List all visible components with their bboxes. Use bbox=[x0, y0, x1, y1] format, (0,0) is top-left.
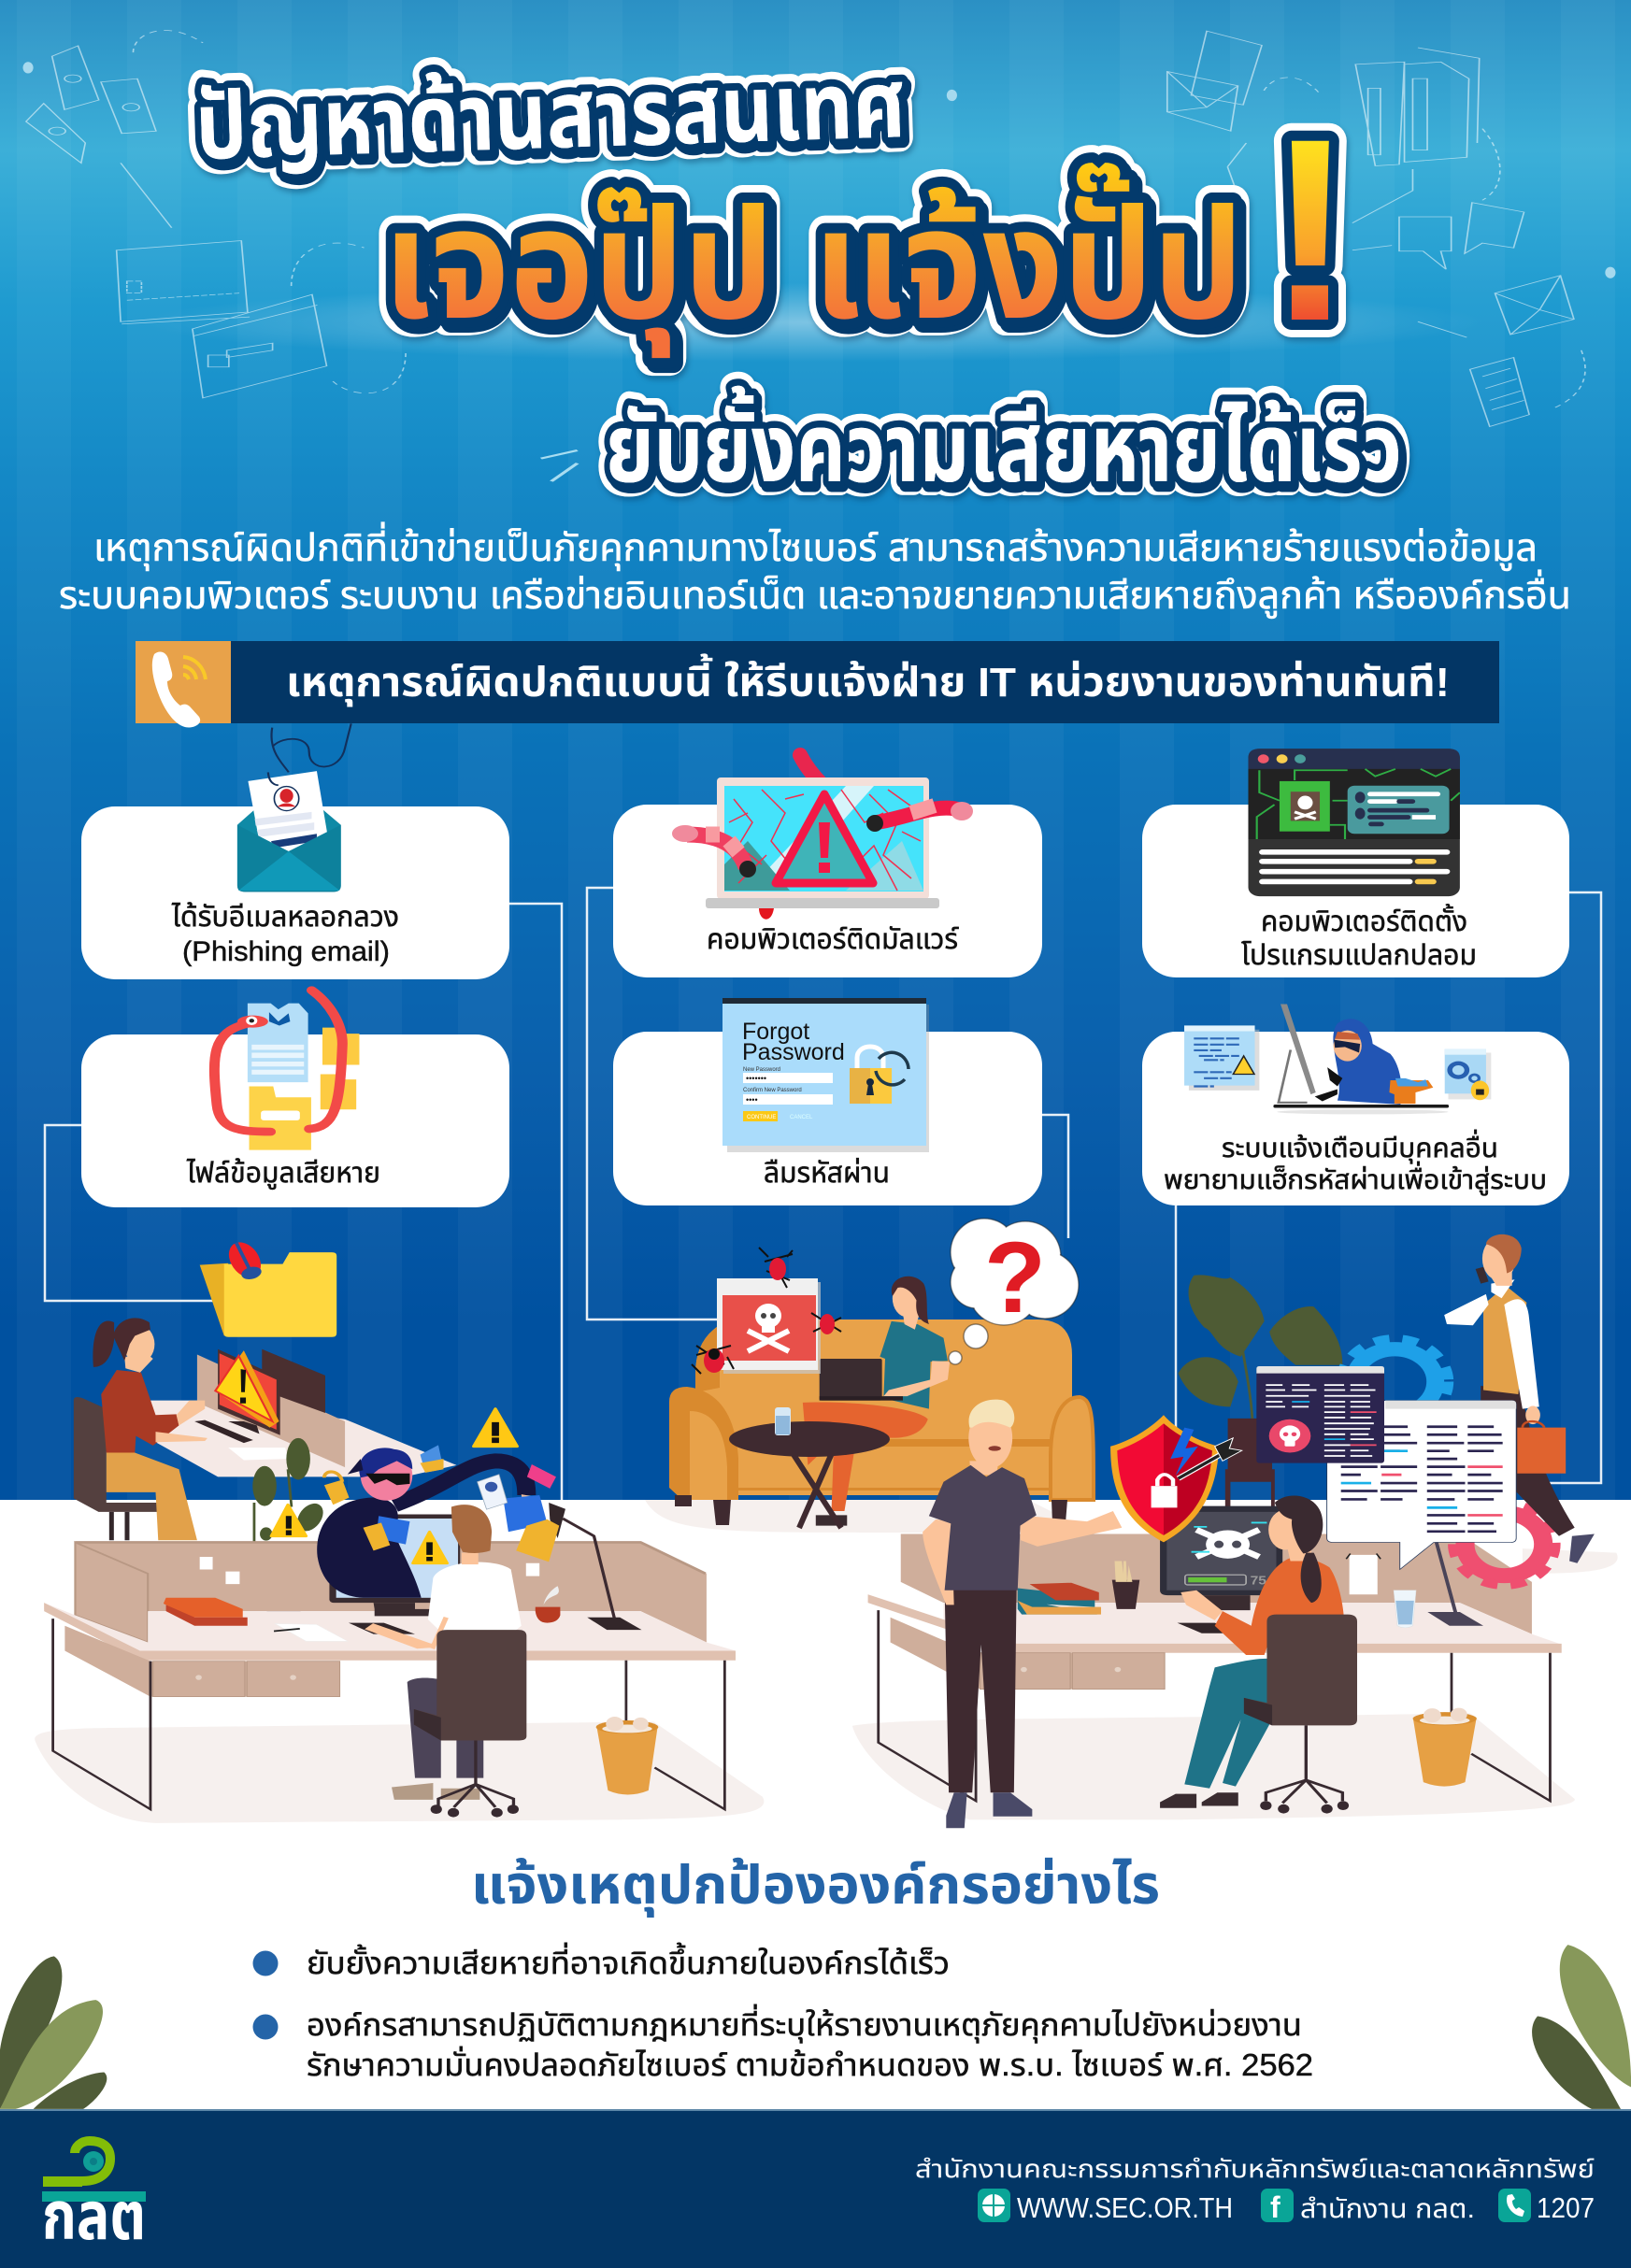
standing man bbox=[923, 1400, 1122, 1828]
shield under attack bbox=[1110, 1415, 1242, 1542]
title line 2 with gradient: เจอปุ๊ป แจ้งปั๊ป bbox=[383, 162, 1243, 358]
hacked monitor: 75 bbox=[1251, 1574, 1266, 1587]
bullet 1: ยับยั้งความเสียหายที่อาจเกิดขึ้นภายในองค์กรได้เร็ว bbox=[307, 1942, 950, 1980]
title line 1: ปัญหาด้านสารสนเทศ bbox=[194, 52, 908, 179]
man on phone with briefcase bbox=[1444, 1234, 1595, 1563]
icon: phone bbox=[152, 652, 206, 727]
card text: คอมพิวเตอร์ติดตั้ง bbox=[1261, 904, 1467, 937]
contact: facebook: f bbox=[1270, 2190, 1280, 2224]
card text: ได้รับอีเมลหลอกลวง bbox=[171, 902, 399, 933]
floor shadow bbox=[35, 1721, 764, 1823]
title line 2 with gradient: เจอปุ๊ป แจ้งปั๊ป bbox=[383, 162, 1243, 358]
icon: laptop with worms bbox=[672, 755, 973, 920]
exclamation mark: ! bbox=[1267, 84, 1353, 375]
title line 3: ยับยั้งความเสียหายได้เร็ว bbox=[606, 386, 1402, 502]
worried woman with laptop bbox=[803, 1277, 950, 1526]
title line 3: ยับยั้งความเสียหายได้เร็ว bbox=[608, 390, 1405, 506]
woman at desk bbox=[74, 1318, 456, 1540]
code window with speech tail bbox=[1327, 1401, 1516, 1569]
intro paragraph: เหตุการณ์ผิดปกติที่เข้าข่ายเป็นภัยคุกคามทางไซเบอร์ สามารถสร้างความเสียหายร้ายแรงต่อข้อมูล bbox=[93, 521, 1538, 571]
title line 1: ปัญหาด้านสารสนเทศ bbox=[194, 52, 908, 179]
card text: คอมพิวเตอร์ติดมัลแวร์ bbox=[707, 924, 959, 955]
card text: ลืมรหัสผ่าน bbox=[764, 1158, 890, 1189]
waste bin bbox=[1413, 1708, 1477, 1787]
thought bubble with question mark: ? bbox=[984, 1220, 1046, 1334]
card: phishing email bbox=[81, 723, 509, 979]
exclamation mark: ! bbox=[1267, 84, 1353, 375]
floor shadow bbox=[852, 1713, 1575, 1819]
vase plant bbox=[252, 1438, 328, 1614]
icon: forgot password form: CANCEL bbox=[790, 1115, 813, 1120]
title line 3: ยับยั้งความเสียหายได้เร็ว bbox=[606, 386, 1402, 502]
card text bbox=[1164, 1129, 1547, 1196]
intro paragraph bbox=[59, 521, 1571, 619]
plant pot bbox=[1225, 1419, 1275, 1506]
alert banner bbox=[136, 641, 1499, 727]
skull warning window with bugs bbox=[692, 1248, 841, 1374]
scene: left office with thief from monitor bbox=[35, 1238, 764, 1823]
contact: website: WWW.SEC.OR.TH bbox=[1017, 2191, 1233, 2224]
title line 2 with gradient: เจอปุ๊ป แจ้งปั๊ป bbox=[383, 162, 1243, 358]
card: malware bbox=[613, 755, 1042, 977]
title line 1: ปัญหาด้านสารสนเทศ bbox=[197, 56, 910, 183]
scene: right office bbox=[852, 1234, 1618, 1828]
title line 1: ปัญหาด้านสารสนเทศ bbox=[194, 52, 908, 179]
logo: กลต bbox=[42, 2179, 146, 2254]
title line 2 with gradient: เจอปุ๊ป แจ้งปั๊ป bbox=[387, 166, 1247, 363]
exclamation mark: ! bbox=[1267, 84, 1353, 375]
icon: forgot password form: Confirm New Password bbox=[743, 1088, 802, 1093]
bullet 2: องค์กรสามารถปฏิบัติตามกฎหมายที่ระบุให้รายงานเหตุภัยคุกคามไปยังหน่วยงาน bbox=[307, 2004, 1302, 2044]
decorative line icons behind the title bbox=[22, 31, 1615, 481]
office name: สำนักงานคณะกรรมการกำกับหลักทรัพย์และตลาดหลักทรัพย์ bbox=[915, 2155, 1595, 2183]
card: forgot password bbox=[613, 998, 1042, 1205]
footer band bbox=[0, 2109, 1631, 2268]
connector lines bbox=[45, 888, 1601, 1577]
card text: พยายามแฮ็กรหัสผ่านเพื่อเข้าสู่ระบบ bbox=[1164, 1161, 1547, 1196]
card text: (Phishing email) bbox=[182, 936, 390, 967]
card text: โปรแกรมแปลกปลอม bbox=[1241, 940, 1477, 971]
dark skull panel bbox=[1256, 1366, 1384, 1463]
contact: facebook: สำนักงาน กลต. bbox=[1300, 2194, 1475, 2224]
card: corrupted files bbox=[81, 991, 509, 1207]
card text: ไฟล์ข้อมูลเสียหาย bbox=[186, 1158, 380, 1190]
lower desk bbox=[44, 1503, 736, 1809]
bullet 2 bbox=[252, 2004, 1313, 2082]
icon: forgot password form: Forgot bbox=[742, 1019, 809, 1045]
woman at desk bbox=[1160, 1495, 1357, 1814]
icon: phishing envelope bbox=[237, 723, 351, 892]
icon: hacker at computer bbox=[1184, 1004, 1491, 1114]
icon: forgot password form: •••• bbox=[746, 1095, 758, 1105]
logo bbox=[42, 2141, 146, 2254]
waste bin bbox=[596, 1717, 658, 1794]
sofa bbox=[669, 1319, 1094, 1525]
table with glass bbox=[729, 1407, 890, 1528]
plants bbox=[1179, 1275, 1342, 1419]
icon: forgot password form: CONTINUE bbox=[747, 1115, 776, 1120]
icon: forgot password form: ••••••• bbox=[746, 1074, 766, 1083]
icon: forgot password form: New Password bbox=[743, 1067, 780, 1073]
card: hacking attempt alert bbox=[1142, 1004, 1569, 1205]
gear: pink bbox=[1453, 1504, 1554, 1585]
contact: facebook bbox=[1261, 2189, 1475, 2224]
icon: worm eating files bbox=[214, 991, 359, 1150]
leaves: left bbox=[0, 1956, 107, 2109]
scene: sofa with worried woman bbox=[645, 1219, 1094, 1533]
right desk bbox=[868, 1533, 1562, 1801]
title: three-line outlined heading bbox=[194, 52, 1405, 506]
card: fake software bbox=[1142, 749, 1569, 977]
card text bbox=[171, 902, 399, 967]
intro paragraph: ระบบคอมพิวเตอร์ ระบบงาน เครือข่ายอินเทอร์เน็ต และอาจขยายความเสียหายถึงลูกค้า หรือองค์กรอื่น bbox=[59, 569, 1571, 619]
icon: infected folder bbox=[200, 1238, 336, 1337]
icon: forgot password form: Password bbox=[742, 1039, 845, 1065]
man at desk seen from behind bbox=[349, 1505, 526, 1818]
heading: how reporting protects the organisation: แจ้งเหตุปกป้ององค์กรอย่างไร bbox=[471, 1855, 1160, 1918]
leaves: right bbox=[1532, 1945, 1631, 2109]
card text: ระบบแจ้งเตือนมีบุคคลอื่น bbox=[1222, 1129, 1498, 1163]
contact: phone bbox=[1498, 2189, 1595, 2224]
contact: phone: 1207 bbox=[1537, 2191, 1595, 2224]
bullet list bbox=[252, 1942, 1313, 2082]
card text bbox=[1241, 904, 1477, 971]
title line 3: ยับยั้งความเสียหายได้เร็ว bbox=[606, 386, 1402, 502]
gear: blue bbox=[1341, 1339, 1448, 1424]
bullet 2: รักษาความมั่นคงปลอดภัยไซเบอร์ ตามข้อกำหนดของ พ.ร.บ. ไซเบอร์ พ.ศ. 2562 bbox=[307, 2046, 1313, 2082]
hacked monitor bbox=[1160, 1506, 1282, 1610]
banner text: เหตุการณ์ผิดปกติแบบนี้ ให้รีบแจ้งฝ่าย IT หน่วยงานของท่านทันที! bbox=[286, 653, 1450, 707]
floor bbox=[0, 1500, 1631, 2109]
thief reaching out of monitor bbox=[317, 1409, 559, 1616]
thought bubble with question mark bbox=[949, 1219, 1079, 1364]
icon: malware program window bbox=[1249, 749, 1460, 896]
background: blue striped wall bbox=[0, 0, 1631, 1501]
icon: forgot password form bbox=[723, 998, 929, 1152]
